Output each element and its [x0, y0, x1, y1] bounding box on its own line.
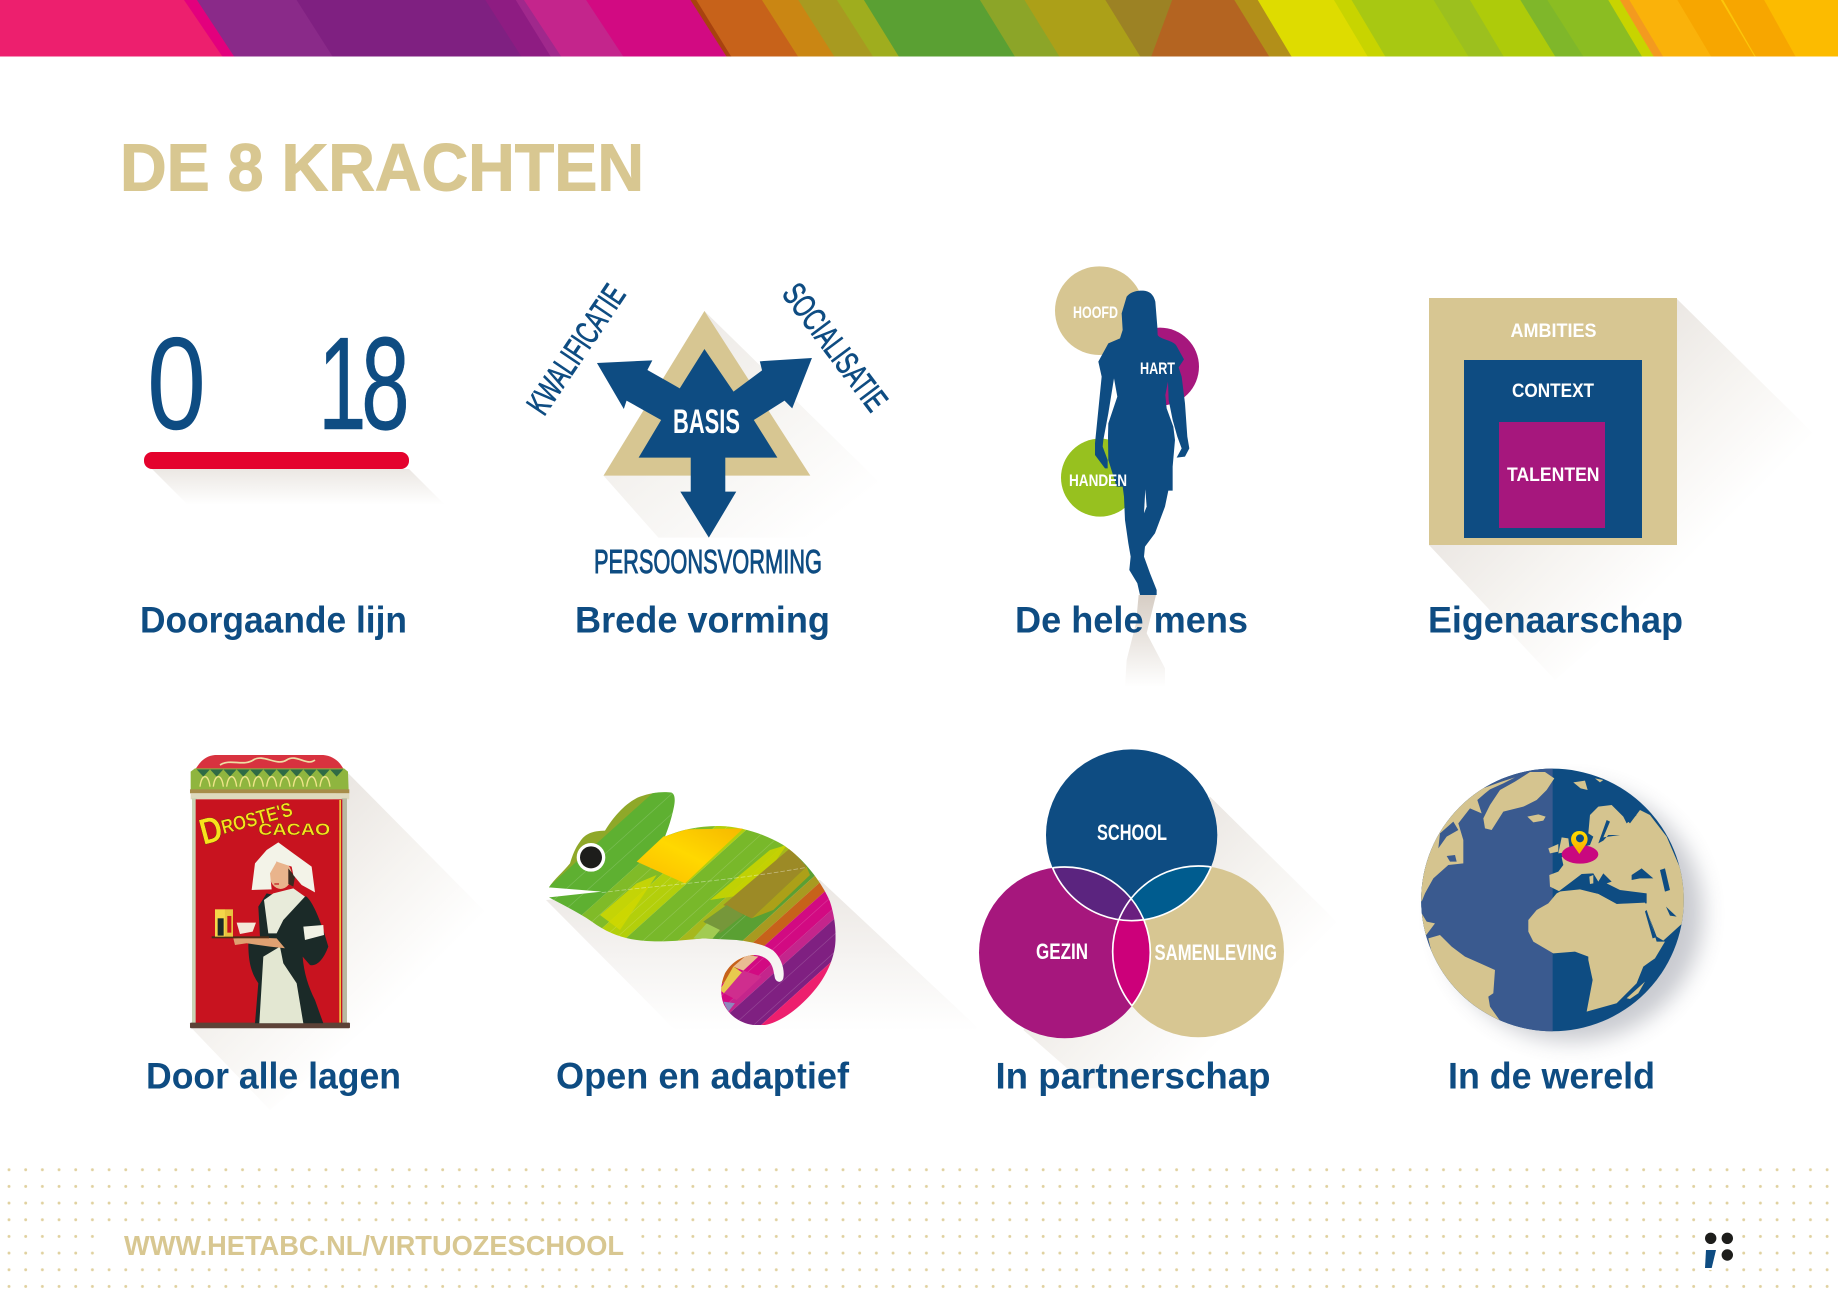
heading: Doorgaande lijn — [140, 599, 407, 641]
logo — [1703, 1232, 1734, 1270]
heading: De hele mens — [1015, 599, 1248, 641]
panel: eigenaarschap — [1428, 298, 1825, 680]
label hoofd: HOOFD — [1073, 303, 1118, 322]
chameleon — [546, 792, 934, 1025]
location marker — [1562, 831, 1598, 864]
footer — [0, 1161, 1834, 1295]
panel: in de wereld — [1410, 767, 1703, 1096]
heading: Open en adaptief — [556, 1054, 849, 1096]
label socialisatie: SOCIALISATIE — [775, 276, 895, 418]
panel: de hele mens — [1015, 266, 1248, 687]
label handen: HANDEN — [1069, 471, 1127, 490]
heading: In de wereld — [1448, 1054, 1655, 1096]
heading: In partnerschap — [996, 1054, 1270, 1096]
lettering — [195, 789, 330, 853]
box talenten — [1499, 422, 1605, 528]
panel: brede vorming — [519, 276, 901, 641]
top colour band — [0, 0, 1838, 57]
venn diagram — [979, 749, 1302, 1088]
heading: Brede vorming — [575, 599, 830, 641]
label context: CONTEXT — [1512, 380, 1594, 402]
panel: open en adaptief — [546, 792, 934, 1096]
globe — [1410, 767, 1703, 1042]
number 0: 0 — [147, 310, 206, 457]
lettering: CACAO — [258, 820, 330, 839]
triangle diagram — [597, 311, 901, 538]
lettering: D — [195, 807, 227, 853]
label persoonsvorming: PERSOONSVORMING — [594, 543, 822, 580]
figure with circles — [1055, 266, 1199, 687]
label kwalificatie: KWALIFICATIE — [519, 278, 633, 421]
red bar — [144, 452, 409, 469]
title: DE 8 KRACHTEN — [120, 131, 644, 206]
number 18: 18 — [318, 310, 406, 457]
website url: WWW.HETABC.NL/VIRTUOZESCHOOL — [124, 1230, 624, 1261]
label talenten: TALENTEN — [1507, 464, 1600, 486]
box context — [1464, 360, 1642, 538]
cacao tin — [190, 755, 493, 1110]
nurse — [212, 842, 328, 1023]
heading: Eigenaarschap — [1428, 599, 1683, 641]
panel: in partnerschap — [979, 749, 1302, 1096]
panel: doorgaande lijn — [140, 310, 445, 641]
heading: Door alle lagen — [146, 1054, 401, 1096]
lettering: ROSTE'S — [219, 799, 295, 839]
panel: door alle lagen — [146, 755, 493, 1110]
label gezin: GEZIN — [1036, 939, 1088, 964]
label school: SCHOOL — [1097, 820, 1167, 845]
box ambities — [1429, 298, 1677, 545]
label hart: HART — [1140, 359, 1175, 378]
shadow of bar — [152, 469, 445, 505]
shadow — [1429, 298, 1825, 680]
label samenleving: SAMENLEVING — [1154, 940, 1277, 965]
label basis: BASIS — [673, 403, 740, 441]
label ambities: AMBITIES — [1510, 320, 1596, 342]
